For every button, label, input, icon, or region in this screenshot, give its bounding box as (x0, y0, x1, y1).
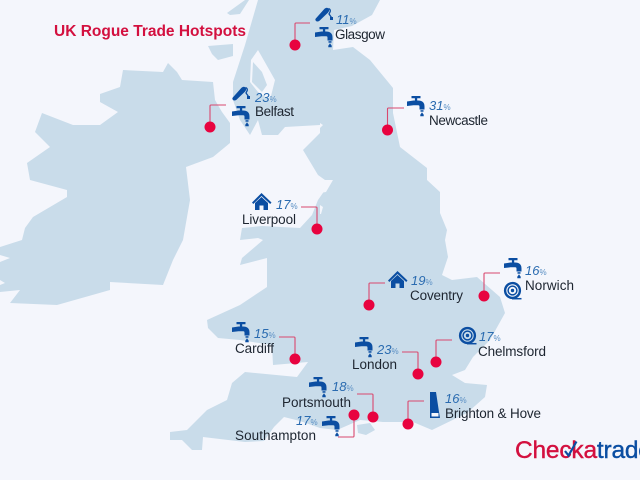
hotspot: Brighton and Hove (402, 391, 541, 430)
hotspot: Cardiff: Cardiff (235, 341, 274, 356)
hotspot: Coventry: 19% (411, 273, 433, 288)
hotspot: Belfast (204, 87, 294, 132)
map: inner islands (208, 0, 249, 60)
hotspot: Southampton: 17% (296, 413, 318, 428)
hotspot: Newcastle: 31% (429, 98, 451, 113)
hotspot: Brighton and Hove: Brighton & Hove (445, 406, 541, 421)
hotspot: Norwich (478, 258, 574, 302)
map: western sea loch (250, 50, 275, 100)
hotspot: Norwich: Norwich (525, 278, 574, 293)
hotspot: Norwich: 16% (525, 263, 547, 278)
hotspot: London: London (352, 357, 397, 372)
hotspot: Portsmouth (282, 377, 378, 422)
hotspot: London: 23% (376, 342, 399, 357)
hotspot: Brighton and Hove: 16% (445, 391, 467, 406)
map: Isle of Wight (357, 423, 375, 435)
hotspot: Liverpool (242, 193, 322, 234)
map: Ireland (0, 63, 230, 305)
map: Morecambe bay (320, 123, 333, 214)
hotspot: Belfast: 23% (254, 90, 277, 105)
map: Great Britain (170, 0, 505, 450)
hotspot: Chelmsford (430, 328, 546, 368)
hotspot: Coventry (364, 271, 463, 310)
hotspot: Southampton (235, 410, 360, 443)
hotspot: London (352, 337, 424, 380)
hotspot: Glasgow (290, 8, 385, 51)
hotspot: Cardiff (232, 322, 300, 364)
hotspot: Cardiff: 15% (254, 326, 276, 341)
hotspot: Belfast: Belfast (255, 104, 294, 119)
hotspot: Glasgow: 11% (336, 12, 357, 27)
hotspot: Chelmsford: Chelmsford (478, 344, 546, 359)
hotspot: Portsmouth: 18% (332, 379, 354, 394)
hotspot: Newcastle (382, 96, 488, 136)
map: Kintyre (252, 62, 267, 92)
hotspot: Portsmouth: Portsmouth (282, 395, 351, 410)
hotspot: Liverpool: 17% (276, 197, 298, 212)
hotspot: Coventry: Coventry (410, 288, 463, 303)
hotspot: Newcastle: Newcastle (429, 113, 488, 128)
hotspot: Glasgow: Glasgow (335, 27, 385, 42)
hotspot: Southampton: Southampton (235, 428, 316, 443)
hotspot: Chelmsford: 17% (479, 329, 501, 344)
title: UK Rogue Trade Hotspots (54, 23, 246, 40)
hotspot: Liverpool: Liverpool (242, 212, 296, 227)
